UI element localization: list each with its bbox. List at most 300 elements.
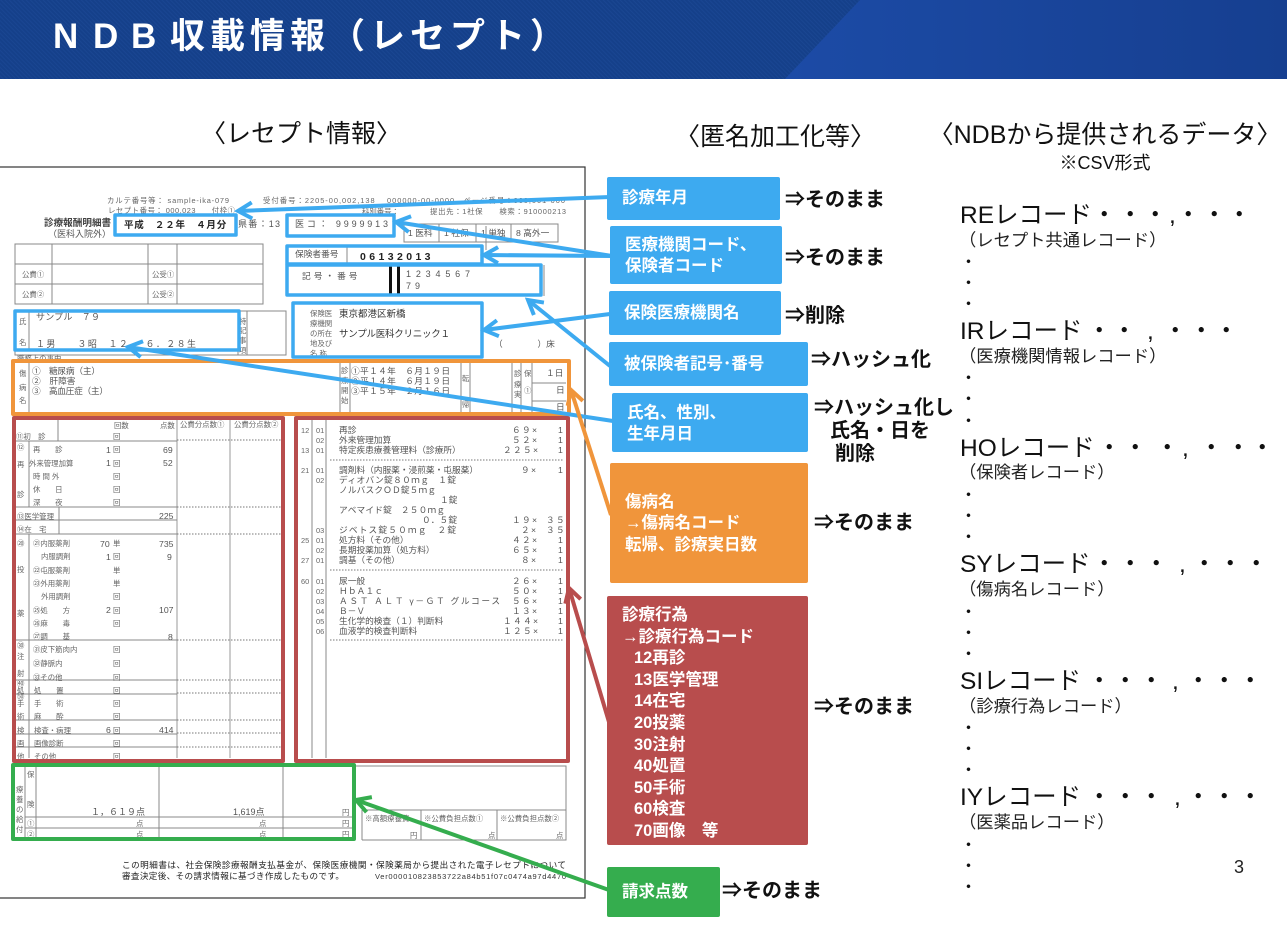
right treatment details table: 01 xyxy=(316,556,324,565)
left points table: ⑭在 宅 xyxy=(17,525,47,534)
left points table: ㉓外用薬剤 xyxy=(33,579,70,588)
public expense table xyxy=(15,244,263,304)
right treatment details table: １２５× xyxy=(503,626,539,636)
right treatment details table: 13 xyxy=(301,446,309,455)
insurer number xyxy=(295,226,544,296)
insurance type cells: 1 社保 xyxy=(444,227,469,238)
right treatment details table: 21 xyxy=(301,466,309,475)
record: SI: （診療行為レコード） xyxy=(959,696,1132,716)
patient name table xyxy=(15,311,286,363)
diagnosis row: 日 xyxy=(556,402,565,412)
left points table: ㊿ xyxy=(17,692,25,701)
right treatment details table: 01 xyxy=(316,536,324,545)
left points table: 回 xyxy=(113,552,120,561)
diagnosis row: 療 xyxy=(514,380,522,389)
right treatment details table: 血液学的検査判断料 xyxy=(339,625,418,636)
right treatment details table: 04 xyxy=(316,607,324,616)
box: medical treatment: 診療行為 xyxy=(622,605,688,624)
right treatment details table: ノルバスクＯＤ錠５ｍｇ xyxy=(339,485,436,495)
insurance type cells xyxy=(404,224,558,242)
box: consultation month: 診療年月 xyxy=(622,187,688,207)
right treatment details table: 調基（その他） xyxy=(339,554,400,565)
record: IY: ・ xyxy=(960,836,977,855)
left points table: 単 xyxy=(113,579,120,588)
right treatment details table: 1 xyxy=(558,445,563,455)
record: IR: ・・,・・・ xyxy=(1087,318,1238,345)
left points table: 回 xyxy=(113,726,120,735)
record: SI: ・ xyxy=(960,719,977,738)
right treatment details table: 12 xyxy=(301,426,309,435)
form header text: レセプト番号： 000,023 付枠① xyxy=(108,206,236,215)
record: HO: ・ xyxy=(960,486,977,505)
benefit totals table: 給 xyxy=(16,815,24,824)
patient name table: 職務上の事由 xyxy=(17,354,61,363)
heading: receipt info: 〈レセプト情報〉 xyxy=(201,120,401,148)
insurer number: 1234567 xyxy=(406,269,470,279)
left points table: 225 xyxy=(159,511,174,521)
left points table: 再 診 xyxy=(33,445,63,454)
box: institution name xyxy=(609,291,781,335)
box: medical treatment: 60検査 xyxy=(634,799,686,818)
box: insured number: 被保険者記号･番号 xyxy=(624,354,764,373)
left points table: 回 xyxy=(113,699,120,708)
right treatment details table: １４４× xyxy=(503,616,539,626)
left points table: ㉑内服薬剤 xyxy=(33,539,70,548)
box: diagnosis xyxy=(610,463,808,583)
right treatment details table: ２２５× xyxy=(503,445,539,455)
record: SI xyxy=(959,668,1262,780)
diagnosis row: 療 xyxy=(341,376,349,385)
right treatment details table: 処方料（その他） xyxy=(339,534,408,545)
diagnosis row: ① 糖尿病（主） xyxy=(32,365,100,376)
insurance type cells: 8 高外一 xyxy=(516,227,550,238)
left points table: 再 xyxy=(17,460,25,469)
left points table: 時 間 外 xyxy=(33,472,60,481)
record: IY: IYレコード xyxy=(960,784,1081,811)
record: IR: ・ xyxy=(960,412,977,431)
form header text: カルテ番号等： sample-ika-079 xyxy=(107,196,229,205)
right treatment details table: ２× xyxy=(521,525,537,535)
medical institution: 療機関 xyxy=(310,319,332,328)
diagnosis row: ③平１５年 ２月１６日 xyxy=(351,385,450,396)
right treatment details table: ５２× xyxy=(512,435,538,445)
right treatment details table: 1 xyxy=(558,425,563,435)
left points table: ㉝その他 xyxy=(33,673,63,682)
arrow: institution code xyxy=(396,222,612,256)
box: medical treatment: 13医学管理 xyxy=(634,669,719,689)
panel: receipt form xyxy=(0,167,585,898)
left points table: 回 xyxy=(113,459,120,468)
box: medical treatment: 12再診 xyxy=(634,648,686,667)
benefit totals table: 点 xyxy=(136,830,144,839)
right treatment details table xyxy=(301,420,566,758)
box: medical treatment: →診療行為コード xyxy=(622,627,754,646)
left points table: ㉒屯服薬剤 xyxy=(33,566,70,575)
left points table: 69 xyxy=(163,445,173,455)
left points table: ⑳ xyxy=(17,539,25,548)
patient name table: １男 ３昭 １２． ６．２８生 xyxy=(36,338,196,349)
benefit totals table: 点 xyxy=(259,830,267,839)
record: RE: ・・・,・・・ xyxy=(1092,202,1252,229)
box: diagnosis: 傷病名 xyxy=(625,492,674,511)
diagnosis row: 診 xyxy=(514,369,522,378)
left points table: 9 xyxy=(167,552,172,562)
arrow: institution name xyxy=(484,314,610,330)
record: HO: ・・・,・・・ xyxy=(1097,435,1274,462)
record: SI: ・・・,・・・ xyxy=(1087,668,1262,695)
box: name, sex, birth date xyxy=(612,393,808,452)
form header text xyxy=(44,196,566,239)
heading: NDB provided data: ※CSV形式 xyxy=(1059,153,1151,173)
form header text: 平成 ２２年 ４月分 xyxy=(124,219,227,231)
right treatment details table: 27 xyxy=(301,556,309,565)
right treatment details table: 06 xyxy=(316,627,324,636)
diagnosis row: 診 xyxy=(341,366,349,375)
right treatment details table: ４２× xyxy=(512,535,538,545)
right treatment details table: ５６× xyxy=(512,596,538,606)
medical institution: サンプル医科クリニック１ xyxy=(339,328,450,340)
label: hashed and removed: ⇒ハッシュ化し xyxy=(814,396,954,419)
medical institution: 東京都港区新橋 xyxy=(339,308,406,320)
left points table: 処 xyxy=(17,686,25,695)
benefit totals table: ※高額療養費 xyxy=(365,814,409,823)
left points table: 手 術 xyxy=(34,699,64,708)
left points table: 点数 xyxy=(160,421,175,430)
header banner xyxy=(0,0,1287,79)
benefit totals table: ① xyxy=(27,819,35,828)
left points table: 回 xyxy=(113,659,120,668)
label: hashed and removed: 削除 xyxy=(835,442,875,465)
right treatment details table: 05 xyxy=(316,617,324,626)
right treatment details table: ５０× xyxy=(512,586,538,596)
left points table xyxy=(15,420,281,761)
right treatment details table: １３× xyxy=(512,606,538,616)
record: SY: SYレコード xyxy=(960,551,1091,578)
right treatment details table: 1 xyxy=(558,555,563,565)
record: IY: （医薬品レコード） xyxy=(959,812,1115,832)
left points table: 回 xyxy=(113,645,120,654)
record: HO: HOレコード xyxy=(960,435,1095,462)
patient name table: 特 xyxy=(239,317,247,326)
box: diagnosis: 転帰、診療実日数 xyxy=(625,535,758,554)
right treatment details table: 1 xyxy=(558,626,563,636)
medical institution: の所在 xyxy=(310,329,332,338)
left points table: ㉗調 基 xyxy=(33,632,71,641)
insurer number: 79 xyxy=(406,281,424,291)
right treatment details table: 1 xyxy=(558,435,563,445)
record: SY: （傷病名レコード） xyxy=(959,579,1115,599)
record: SY xyxy=(959,551,1268,664)
diagnosis row: 日 xyxy=(556,385,565,395)
right treatment details table: 60 xyxy=(301,577,309,586)
box: billed points: 請求点数 xyxy=(622,881,688,901)
diagnosis row: 名 xyxy=(19,396,26,405)
label: hashed and removed xyxy=(814,396,954,465)
diagnosis row: ③ 高血圧症（主） xyxy=(32,385,108,396)
diagnosis row: ② 肝障害 xyxy=(32,375,76,386)
left points table: 414 xyxy=(159,725,174,735)
benefit totals table: 点 xyxy=(488,831,496,840)
box: institution and insurer code xyxy=(610,226,782,284)
right treatment details table: 01 xyxy=(316,577,324,586)
label: delete: ⇒削除 xyxy=(785,304,845,327)
benefit totals table: 1,619点 xyxy=(233,807,265,817)
patient name table: 事 xyxy=(239,336,247,345)
left points table: 術 xyxy=(17,712,25,721)
patient name table: 項 xyxy=(239,346,247,355)
right treatment details table: ３５ xyxy=(546,525,566,535)
benefit totals table: 付 xyxy=(16,825,24,834)
left points table: ㉕処 方 xyxy=(33,606,70,615)
right treatment details table: 尿一般 xyxy=(339,575,365,586)
public expense table: 公受② xyxy=(152,290,175,299)
left points table: 52 xyxy=(163,458,173,468)
benefit totals table: 円 xyxy=(342,819,349,828)
benefit totals table: 点 xyxy=(259,819,267,828)
record: RE: ・ xyxy=(960,253,977,272)
left points table: 休 日 xyxy=(33,485,63,494)
heading: NDB provided data: 〈NDBから提供されるデータ〉 xyxy=(929,121,1281,149)
header banner: NDB収載情報（レセプト） xyxy=(53,17,565,56)
form header text: 診療報酬明細書 xyxy=(44,217,112,229)
form header text: （医科入院外） xyxy=(48,228,111,239)
right treatment details table: 1 xyxy=(558,616,563,626)
patient name table: 名 xyxy=(19,338,26,347)
left points table: 回 xyxy=(113,592,120,601)
left points table: ⑬医学管理 xyxy=(17,512,55,521)
left points table: 70 xyxy=(100,539,110,549)
benefit totals table: 険 xyxy=(27,800,35,809)
form header text: 提出先：1社保 検索：910000213 xyxy=(430,207,566,216)
left points table: 外用調剤 xyxy=(41,592,71,601)
insurance type cells: 1 医科 xyxy=(408,227,433,238)
form footnote: 審査決定後、その請求情報に基づき作成したものです。 xyxy=(122,870,344,881)
record: SI: ・ xyxy=(960,761,977,780)
right treatment details table: １錠 xyxy=(440,495,458,505)
left points table: 投 xyxy=(17,565,25,574)
right treatment details table: 03 xyxy=(316,597,324,606)
right treatment details table: ０．５錠 xyxy=(422,515,457,525)
right treatment details table: 生化学的検査（１）判断料 xyxy=(339,615,444,626)
record: RE: ・ xyxy=(960,295,977,314)
right treatment details table: Ｂ－Ｖ xyxy=(339,606,365,616)
right treatment details table: 調剤料（内服薬・浸煎薬・屯服薬） xyxy=(339,464,478,475)
left points table: 回 xyxy=(113,472,120,481)
right treatment details table: 特定疾患療養管理料（診療所） xyxy=(339,444,461,455)
benefit totals table: ② xyxy=(27,830,35,839)
medical institution: 保険医 xyxy=(310,309,333,318)
benefit totals table xyxy=(16,766,566,840)
record: RE xyxy=(959,202,1252,314)
label: as is: ⇒そのまま xyxy=(785,247,885,269)
record: IR: IRレコード xyxy=(960,318,1082,345)
record: IR: ・ xyxy=(960,390,977,409)
right treatment details table: 1 xyxy=(558,576,563,586)
left points table: 回 xyxy=(113,619,120,628)
right treatment details table: 02 xyxy=(316,436,324,445)
diagnosis row: 転 xyxy=(462,374,470,383)
benefit totals table: の xyxy=(16,805,23,814)
left points table: 薬 xyxy=(17,609,25,618)
benefit totals table: 円 xyxy=(342,830,349,839)
left points table: 回 xyxy=(113,445,120,454)
left points table: 6 xyxy=(106,725,111,735)
left points table: 手 xyxy=(17,699,25,708)
left points table: 画 xyxy=(17,739,24,748)
diagnosis row: 開 xyxy=(341,386,348,395)
left points table: 回 xyxy=(113,606,120,615)
right treatment details table: 02 xyxy=(316,546,324,555)
benefit totals table: 円 xyxy=(410,831,417,840)
diagnosis row: ②平１４年 ６月１９日 xyxy=(351,375,450,386)
right treatment details table: 外来管理加算 xyxy=(339,434,391,445)
left points table: 検 xyxy=(17,726,25,735)
diagnosis row: ① xyxy=(524,386,532,395)
left points table: 735 xyxy=(159,539,174,549)
benefit totals table: １，６１９点 xyxy=(91,807,145,817)
form header text: 科別番号： xyxy=(362,207,399,216)
right treatment details table: ジベトス錠５０ｍｇ ２錠 xyxy=(339,525,456,535)
left points table: 射 xyxy=(17,669,25,678)
right treatment details table: 01 xyxy=(316,446,324,455)
left points table: 回 xyxy=(113,712,120,721)
record: IY: ・・・,・・・ xyxy=(1087,784,1262,811)
box: name, sex, birth date: 生年月日 xyxy=(627,423,693,443)
heading: anonymization: 〈匿名加工化等〉 xyxy=(675,123,875,151)
left points table: ㉖麻 毒 xyxy=(33,619,71,628)
record: IY: ・ xyxy=(960,878,977,897)
left points table: 回 xyxy=(113,498,120,507)
arrow: insured number xyxy=(528,300,610,366)
right treatment details table: 1 xyxy=(558,596,563,606)
right treatment details table: ３５ xyxy=(546,515,566,525)
right treatment details table: 01 xyxy=(316,426,324,435)
record: HO: ・ xyxy=(960,507,977,526)
highlight frames on form xyxy=(13,215,569,839)
left points table: ㉜静脈内 xyxy=(33,659,63,668)
right treatment details table: 03 xyxy=(316,526,324,535)
right treatment details table: 1 xyxy=(558,586,563,596)
right treatment details table: 1 xyxy=(558,465,563,475)
diagnosis row: 傷 xyxy=(19,369,27,378)
benefit totals table: 療 xyxy=(16,785,24,794)
left points table: 外来管理加算 xyxy=(29,459,73,468)
right treatment details table: 1 xyxy=(558,606,563,616)
page number: 3 xyxy=(1234,857,1244,877)
right treatment details table: ディオバン錠８０ｍｇ １錠 xyxy=(339,474,456,485)
left points table: 公費分点数② xyxy=(234,420,279,429)
record: SI: SIレコード xyxy=(960,668,1081,695)
box: medical treatment: 30注射 xyxy=(634,735,686,754)
right treatment details table: 02 xyxy=(316,476,324,485)
form footnote: Ver000010823853722a84b51f07c0474a97d4470 xyxy=(375,872,566,881)
right treatment details table: 01 xyxy=(316,466,324,475)
right treatment details table: ９× xyxy=(521,465,537,475)
box: diagnosis: →傷病名コード xyxy=(625,513,740,532)
record: HO xyxy=(959,435,1274,547)
right treatment details table: アベマイド錠 ２５０ｍｇ xyxy=(339,505,445,515)
insurance type cells: 1 単独 xyxy=(481,227,506,238)
patient name table: 氏 xyxy=(19,317,27,326)
diagnosis row: 帰 xyxy=(462,400,469,409)
arrow: name, sex, birth date xyxy=(128,347,613,421)
arrow: consultation month xyxy=(238,197,610,211)
left points table: 回数 xyxy=(114,421,129,430)
label: as is: ⇒そのまま xyxy=(722,880,822,902)
left points table: 2 xyxy=(106,605,111,615)
form header text: 医コ： 9999913 xyxy=(295,219,388,229)
left points table: 画像診断 xyxy=(34,739,64,748)
record: IR: （医療機関情報レコード） xyxy=(959,346,1166,366)
public expense table: 公受① xyxy=(152,270,175,279)
left points table: 回 xyxy=(113,485,120,494)
form footnote: この明細書は、社会保険診療報酬支払基金が、保険医療機関・保険薬局から提出された電子レセプトについて xyxy=(122,859,566,870)
left points table: 深 夜 xyxy=(33,498,63,507)
benefit totals table: 保 xyxy=(27,770,35,779)
benefit totals table: 養 xyxy=(16,795,24,804)
left points table: 麻 酔 xyxy=(34,712,64,721)
left points table: 処 置 xyxy=(34,686,64,695)
arrow: billed points xyxy=(356,800,609,890)
patient name table: サンプル ７９ xyxy=(36,312,100,322)
left points table: 1 xyxy=(106,552,111,562)
right treatment details table: ６９× xyxy=(512,425,538,435)
left points table: 1 xyxy=(106,445,111,455)
left points table: 1 xyxy=(106,458,111,468)
arrow: insurer code xyxy=(484,255,612,256)
diagnosis row: ①平１４年 ６月１９日 xyxy=(351,365,450,376)
left points table: ㉚ xyxy=(17,641,25,650)
benefit totals table: ※公費負担点数① xyxy=(424,814,484,823)
form header text: 受付番号：2205-00,002,138 000000-00-0000 ページ番号：000,001-000 xyxy=(263,196,565,205)
record: IY: ・ xyxy=(960,857,977,876)
box: medical treatment xyxy=(607,596,808,845)
record: RE: （レセプト共通レコード） xyxy=(959,230,1166,250)
public expense table: 公費① xyxy=(22,270,45,279)
left points table: その他 xyxy=(34,752,57,761)
insurer number: 保険者番号 xyxy=(295,248,339,259)
left points table: ㊵ xyxy=(17,679,25,688)
box: institution and insurer code: 保険者コード xyxy=(625,256,724,275)
box: medical treatment: 70画像 等 xyxy=(634,820,718,840)
form footnote xyxy=(122,859,566,881)
left points table: 回 xyxy=(113,432,120,441)
record: SI: ・ xyxy=(960,740,977,759)
right treatment details table: 1 xyxy=(558,535,563,545)
label: as is: ⇒そのまま xyxy=(814,512,914,534)
right treatment details table: １９× xyxy=(512,515,538,525)
right treatment details table: 1 xyxy=(558,545,563,555)
diagnosis row: 始 xyxy=(341,396,349,405)
arrow: treatment xyxy=(569,588,609,722)
label: hashed: ⇒ハッシュ化 xyxy=(811,348,931,371)
left points table: 他 xyxy=(17,752,25,761)
medical institution: （ ）床 xyxy=(494,339,555,349)
left points table: 回 xyxy=(113,752,120,761)
record: RE: REレコード xyxy=(960,202,1092,229)
record: IR: ・ xyxy=(960,369,977,388)
record: RE: ・ xyxy=(960,274,977,293)
left points table: 回 xyxy=(113,673,120,682)
right treatment details table: ＡＳＴ ＡＬＴ γ－ＧＴ グルコース xyxy=(339,595,500,606)
public expense table: 公費② xyxy=(22,290,45,299)
diagnosis row: 病 xyxy=(19,383,27,392)
box: insured number xyxy=(609,342,808,386)
left points table: 単 xyxy=(113,539,120,548)
left points table: ⑪初 診 xyxy=(16,432,46,441)
diagnosis row: 保 xyxy=(524,369,532,378)
left points table: 注 xyxy=(17,652,25,661)
